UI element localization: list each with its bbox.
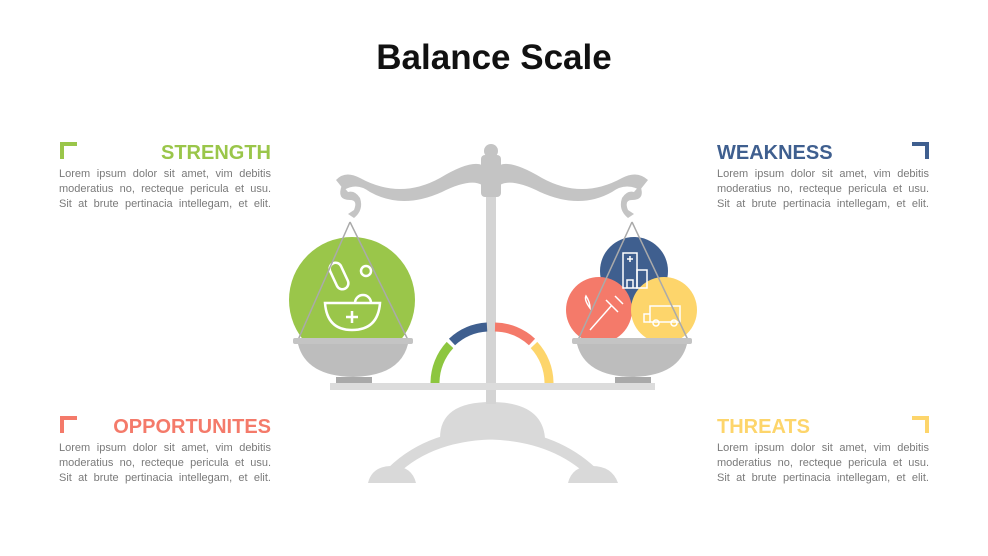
corner mark coral [60, 416, 77, 433]
panel: strength: Lorem ipsum dolor sit amet, vim debitis moderatius no, recteque pericula et usu. Sit at brute pertinacia intellegam, et elit. [59, 168, 271, 210]
left pan [293, 338, 413, 383]
panel: threats [717, 416, 929, 484]
panel: strength [59, 142, 271, 210]
beam [336, 144, 648, 218]
corner mark yellow [912, 416, 929, 433]
panel: weakness [717, 142, 929, 210]
strings [298, 222, 408, 340]
panel: threats: Lorem ipsum dolor sit amet, vim debitis moderatius no, recteque pericula et usu. Sit at brute pertinacia intellegam, et elit. [717, 442, 929, 484]
right pan contents [566, 237, 697, 343]
right pan [572, 338, 692, 383]
panel: opportunities: OPPORTUNITES [113, 416, 271, 438]
panel: opportunities [59, 416, 271, 484]
corner mark blue [912, 142, 929, 159]
panel: weakness: WEAKNESS [717, 142, 833, 164]
panel: opportunities: Lorem ipsum dolor sit amet, vim debitis moderatius no, recteque pericula et usu. Sit at brute pertinacia intellegam, et elit. [59, 442, 271, 484]
panel: strength: STRENGTH [161, 142, 271, 164]
title: Balance Scale [376, 38, 612, 77]
left pan contents: green circle with mortar icon [289, 237, 415, 363]
arc gauge [435, 327, 549, 383]
corner mark green [60, 142, 77, 159]
base [368, 402, 618, 483]
panel: threats: THREATS [717, 416, 810, 438]
horizontal bar [330, 383, 655, 390]
pillar [486, 190, 496, 404]
hooks [340, 185, 361, 218]
panel: weakness: Lorem ipsum dolor sit amet, vim debitis moderatius no, recteque pericula et usu. Sit at brute pertinacia intellegam, et elit. [717, 168, 929, 210]
